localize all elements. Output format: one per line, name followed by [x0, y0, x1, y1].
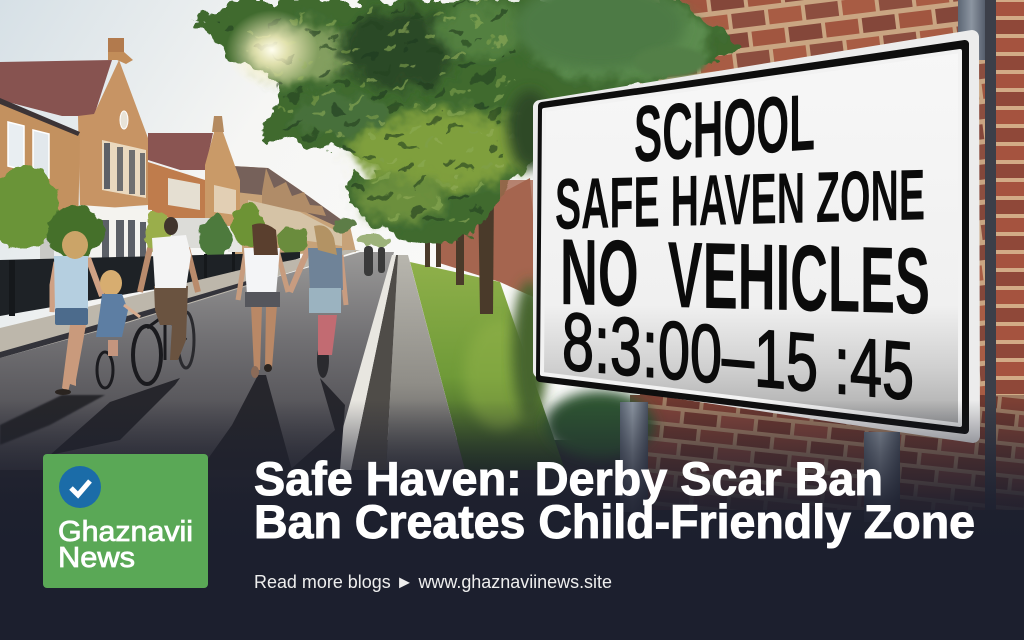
woman with blonde hair — [52, 231, 102, 395]
read more link: Read more blogs ► www.ghaznaviinews.site — [254, 572, 612, 592]
icon: blue check circle — [59, 466, 101, 508]
sign border — [540, 44, 965, 430]
second house — [148, 116, 242, 252]
tree canopy — [195, 0, 740, 245]
garden hedges and street trees on left — [0, 166, 393, 260]
logo name: News — [58, 542, 135, 574]
far-side brick wall and grass verge — [410, 178, 565, 470]
tree trunks — [425, 185, 494, 314]
dark gradient overlay at bottom — [0, 400, 1024, 640]
sun glare — [226, 10, 318, 90]
far pedestrians — [364, 246, 385, 276]
iron fence — [0, 252, 300, 316]
logo name: Ghaznavii — [58, 516, 193, 548]
girl on pink bike — [290, 225, 346, 378]
title: Ban Creates Child-Friendly Zone — [254, 495, 975, 548]
far house row — [232, 166, 356, 256]
brick wall on the right — [630, 0, 1024, 510]
people walking and cycling — [52, 217, 346, 395]
road surface — [0, 252, 394, 470]
foliage behind sign — [500, 0, 706, 459]
footpath with white line — [331, 255, 465, 470]
row of houses — [0, 38, 356, 262]
dark base below the photo — [0, 440, 1024, 640]
main gabled house — [0, 38, 152, 262]
kerb line on left road edge — [0, 280, 250, 358]
child on small bike — [96, 270, 140, 388]
sign face — [542, 51, 960, 425]
title: Safe Haven: Derby Scar Ban — [254, 452, 883, 505]
sign posts — [620, 402, 900, 522]
road shadows — [0, 375, 345, 470]
logo badge — [43, 454, 208, 588]
woman in white shirt — [238, 223, 288, 378]
logo name — [58, 516, 193, 574]
pavement on left — [0, 250, 360, 358]
sign line: school: SCHOOL — [634, 76, 815, 179]
man with bicycle — [133, 217, 198, 384]
road sign — [540, 37, 973, 436]
sign board — [540, 37, 973, 436]
title — [254, 452, 975, 548]
